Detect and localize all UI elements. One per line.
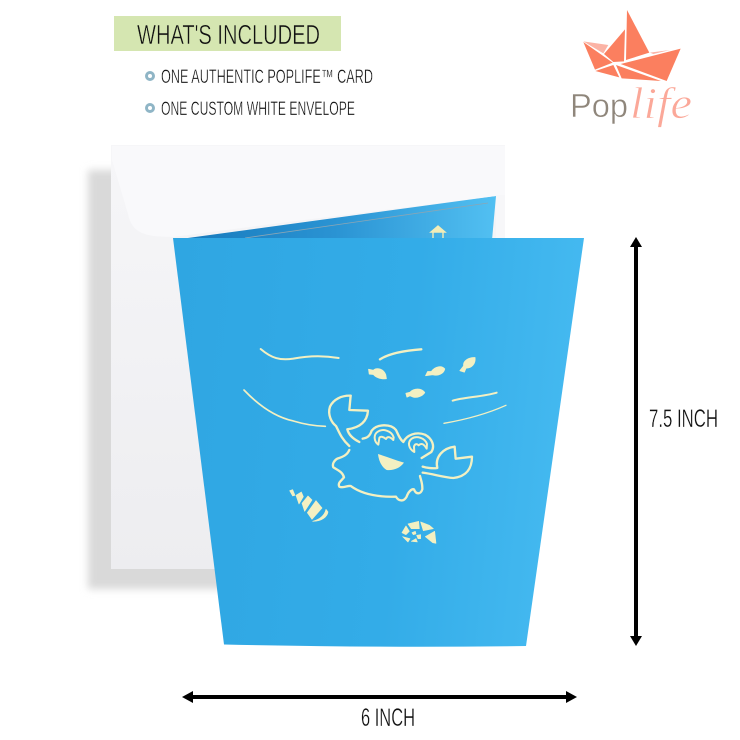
right claw <box>423 447 472 478</box>
right eye <box>409 437 427 452</box>
icon: paper boat <box>583 10 681 81</box>
crab cutout illustration <box>244 349 506 543</box>
body outline <box>333 450 422 500</box>
crab body <box>329 396 472 500</box>
envelope flap <box>112 146 505 237</box>
logo: poplife <box>570 10 692 128</box>
shell <box>290 490 328 521</box>
wordmark <box>570 79 692 128</box>
blue card front <box>173 238 584 647</box>
list item: envelope <box>146 99 355 120</box>
heading: what's included <box>114 16 341 51</box>
list item: authentic card: ONE AUTHENTIC POPLIFE™ CARD <box>161 67 373 88</box>
envelope <box>111 145 505 569</box>
what's included panel <box>114 16 373 120</box>
card inside envelope <box>173 196 496 240</box>
heading: what's included: WHAT'S INCLUDED <box>137 19 320 50</box>
starfish shell <box>402 521 436 543</box>
left eye <box>375 430 394 445</box>
fish <box>369 358 475 397</box>
wordmark: Pop <box>570 87 628 124</box>
icon: lighthouse peek <box>431 226 445 239</box>
list item: authentic card <box>146 67 373 88</box>
head <box>363 425 433 458</box>
label: 6 inch: 6 INCH <box>361 704 415 732</box>
list item: envelope: ONE CUSTOM WHITE ENVELOPE <box>161 99 355 120</box>
arrow: height dimension <box>630 237 642 646</box>
mouth <box>378 454 404 470</box>
arrow: width dimension <box>182 691 577 703</box>
wordmark: life <box>630 79 692 128</box>
envelope shadow <box>88 170 232 589</box>
left claw <box>329 396 351 446</box>
waves <box>244 349 506 426</box>
